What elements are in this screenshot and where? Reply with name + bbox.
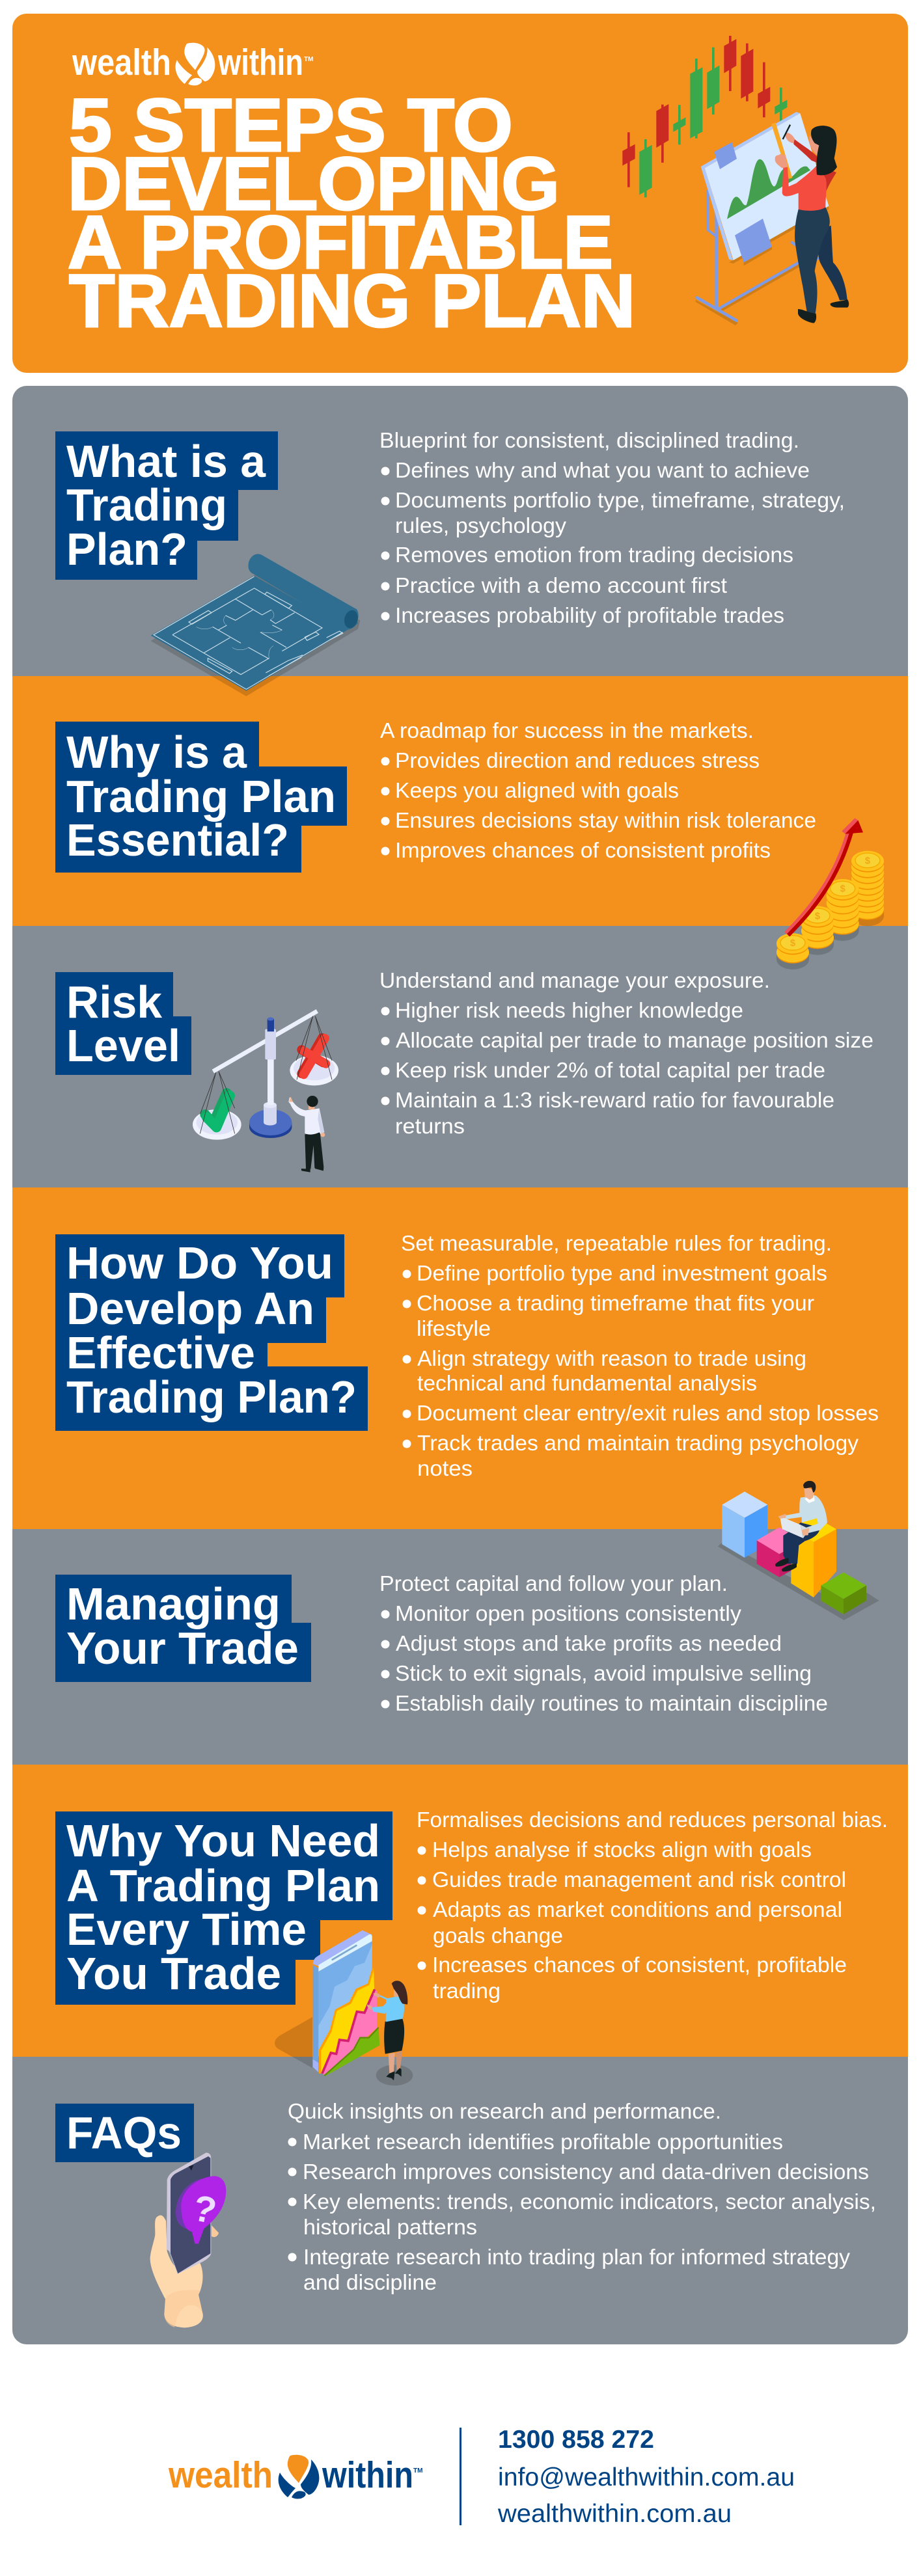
text block: risk level: Higher risk needs higher knowledge	[395, 998, 743, 1022]
title: A PROFITABLE	[68, 201, 613, 284]
heading: managing your trade	[55, 1575, 311, 1682]
text block: what is a trading plan: Defines why and what you want to achieve	[395, 458, 810, 482]
text block: managing your trade: Establish daily routines to maintain discipline	[395, 1691, 828, 1715]
text block: risk level: returns	[395, 1114, 465, 1138]
text block: FAQs: Integrate research into trading plan for informed strategy	[303, 2245, 850, 2269]
stack 2	[801, 906, 834, 949]
text block: what is a trading plan: Blueprint for consistent, disciplined trading.	[379, 428, 799, 452]
text block: why is a trading plan essential: Keeps you aligned with goals	[395, 778, 679, 802]
heading: risk level	[55, 972, 191, 1075]
heading: risk level: Level	[66, 1020, 180, 1071]
heading: what is a trading plan: Plan?	[66, 524, 187, 575]
heading: how do you develop an effective trading plan: Trading Plan?	[66, 1372, 357, 1422]
text block: what is a trading plan: Removes emotion from trading decisions	[395, 543, 793, 567]
text block: why you need a trading plan: Formalises decisions and reduces personal bias.	[417, 1808, 888, 1832]
contact details: 1300 858 272	[498, 2426, 654, 2454]
scale stand	[213, 1011, 317, 1138]
panel: what is a trading plan background	[12, 386, 908, 676]
floor plan lines	[154, 576, 343, 689]
stack 1	[777, 933, 809, 964]
footer logo	[168, 2454, 422, 2499]
text block: what is a trading plan	[379, 428, 845, 627]
footer logo: TM	[413, 2467, 422, 2474]
text block: managing your trade: Adjust stops and take profits as needed	[396, 1631, 782, 1655]
heading: managing your trade: Managing	[66, 1579, 281, 1629]
candlesticks	[622, 36, 787, 197]
text block: risk level	[379, 968, 873, 1138]
header logo: within	[217, 42, 303, 83]
heading: why is a trading plan essential	[55, 722, 347, 873]
text block: why is a trading plan essential	[380, 718, 816, 862]
text block: how do you develop an effective trading plan: lifestyle	[417, 1316, 491, 1340]
easel stand	[697, 191, 818, 321]
heading: why is a trading plan essential: Essential?	[66, 815, 289, 865]
icon: rolled blueprint	[151, 554, 360, 696]
icon: woman drawing candlestick chart on board	[622, 36, 849, 325]
text block: FAQs: Key elements: trends, economic indicators, sector analysis,	[303, 2190, 876, 2214]
hand	[150, 2216, 219, 2327]
text block: managing your trade	[379, 1571, 828, 1715]
text block: managing your trade: Monitor open positions consistently	[395, 1601, 742, 1625]
contact details	[497, 2426, 795, 2528]
text block: how do you develop an effective trading plan: Align strategy with reason to trade using	[417, 1346, 806, 1370]
icon: coin stacks with rising arrow	[777, 818, 884, 969]
icon: logo symbol white	[176, 43, 215, 85]
text block: FAQs: historical patterns	[303, 2215, 477, 2239]
text block: FAQs: Market research identifies profitable opportunities	[303, 2130, 783, 2154]
stack 3: $	[840, 884, 845, 895]
panel: why is a trading plan essential background	[12, 676, 908, 926]
footer logo: wealth	[168, 2454, 273, 2496]
header logo: TM	[304, 56, 313, 63]
icon: hand holding phone with question bubble	[150, 2152, 226, 2327]
contact details: wealthwithin.com.au	[497, 2500, 732, 2528]
arrow	[786, 818, 863, 935]
text block: what is a trading plan: rules, psychology	[395, 513, 567, 537]
left pan with check	[193, 1072, 241, 1140]
title: DEVELOPING	[68, 142, 560, 226]
stack 3	[827, 879, 859, 935]
heading: how do you develop an effective trading plan: Develop An	[66, 1283, 314, 1334]
text block: why you need a trading plan: goals change	[433, 1923, 563, 1947]
text block: how do you develop an effective trading plan: Choose a trading timeframe that fits your	[417, 1291, 814, 1315]
stack 4	[851, 851, 884, 920]
title: TRADING PLAN	[69, 260, 635, 343]
heading: what is a trading plan	[55, 431, 278, 580]
phone	[313, 1931, 372, 2072]
footer logo: within	[322, 2454, 413, 2496]
panel: how do you develop an effective trading plan background	[12, 1187, 908, 1529]
panel: managing your trade background	[12, 1529, 908, 1765]
header logo	[72, 42, 313, 85]
text block: FAQs	[288, 2099, 876, 2294]
text block: risk level: Keep risk under 2% of total capital per trade	[395, 1058, 825, 1082]
title: 5 STEPS TO	[69, 84, 513, 167]
text block: FAQs: Research improves consistency and data-driven decisions	[303, 2160, 869, 2184]
contact details: info@wealthwithin.com.au	[498, 2463, 795, 2491]
text block: how do you develop an effective trading plan: technical and fundamental analysis	[417, 1371, 757, 1395]
text block: how do you develop an effective trading plan: Set measurable, repeatable rules for trading.	[401, 1231, 832, 1255]
panel: risk level background	[12, 926, 908, 1187]
man	[288, 1096, 325, 1173]
question bubble: ?	[189, 2188, 220, 2232]
board	[701, 112, 829, 262]
heading: why is a trading plan essential: Trading Plan	[66, 771, 336, 822]
heading: how do you develop an effective trading plan: Effective	[66, 1327, 255, 1378]
heading: why you need a trading plan every time you trade: Every Time	[66, 1904, 307, 1955]
text block: why you need a trading plan	[417, 1808, 888, 2003]
icon: man with laptop sitting on coloured blocks	[718, 1481, 879, 1620]
heading: managing your trade: Your Trade	[66, 1623, 299, 1674]
rising chart layers	[319, 1968, 379, 2076]
text block: how do you develop an effective trading plan	[401, 1231, 879, 1480]
icon: logo symbol colour	[279, 2455, 319, 2499]
heading: how do you develop an effective trading plan: How Do You	[66, 1238, 333, 1288]
text block: risk level: Allocate capital per trade to manage position size	[396, 1028, 873, 1052]
text block: managing your trade: Protect capital and follow your plan.	[379, 1571, 728, 1595]
text block: how do you develop an effective trading plan: Define portfolio type and investment goals	[417, 1261, 827, 1285]
text block: why you need a trading plan: Helps analyse if stocks align with goals	[432, 1837, 812, 1862]
text block: what is a trading plan: Practice with a demo account first	[395, 573, 727, 597]
stack 4: $	[865, 856, 870, 866]
yellow block	[791, 1516, 836, 1597]
text block: why is a trading plan essential: Improves chances of consistent profits	[395, 838, 771, 862]
text block: how do you develop an effective trading plan: notes	[417, 1456, 473, 1480]
stack 1: $	[790, 938, 795, 949]
icon: woman with giant phone and rising chart	[275, 1931, 413, 2085]
panel: why you need a trading plan background	[12, 1765, 908, 2057]
pink block	[757, 1527, 803, 1577]
text block: how do you develop an effective trading plan: Document clear entry/exit rules and stop losses	[417, 1401, 879, 1425]
question bubble	[176, 2176, 226, 2244]
text block: how do you develop an effective trading plan: Track trades and maintain trading psychology	[417, 1431, 859, 1455]
text block: FAQs: Quick insights on research and performance.	[288, 2099, 721, 2123]
text block: risk level: Understand and manage your exposure.	[379, 968, 770, 992]
text block: why you need a trading plan: trading	[433, 1979, 501, 2003]
text block: why you need a trading plan: Increases chances of consistent, profitable	[432, 1953, 847, 1977]
woman	[771, 122, 849, 323]
text block: why you need a trading plan: Adapts as market conditions and personal	[433, 1897, 842, 1921]
green block	[821, 1573, 866, 1614]
header logo: wealth	[72, 42, 171, 83]
text block: managing your trade: Stick to exit signals, avoid impulsive selling	[395, 1661, 812, 1685]
panel: FAQs background	[12, 2057, 908, 2344]
text block: risk level: Maintain a 1:3 risk-reward ratio for favourable	[395, 1088, 834, 1112]
text block: why is a trading plan essential: A roadmap for success in the markets.	[380, 718, 754, 742]
text block: what is a trading plan: Documents portfolio type, timeframe, strategy,	[395, 488, 845, 512]
stack 2: $	[815, 911, 820, 921]
icon: balance scale with check, cross and man	[193, 1011, 338, 1173]
easel shadows	[696, 206, 829, 325]
phone	[167, 2152, 211, 2274]
text block: why is a trading plan essential: Ensures decisions stay within risk tolerance	[395, 808, 816, 832]
seated man	[775, 1481, 827, 1571]
text block: FAQs: and discipline	[303, 2270, 437, 2294]
panel: header	[12, 14, 908, 373]
heading: how do you develop an effective trading plan	[55, 1234, 368, 1431]
text block: why you need a trading plan: Guides trade management and risk control	[432, 1867, 846, 1891]
text block: what is a trading plan: Increases probability of profitable trades	[395, 603, 784, 627]
right pan with cross	[290, 1016, 338, 1085]
heading: why you need a trading plan every time you trade: You Trade	[66, 1948, 281, 1999]
title	[68, 84, 635, 343]
heading: FAQs: FAQs	[66, 2108, 182, 2158]
heading: what is a trading plan: Trading	[66, 480, 227, 530]
heading: why you need a trading plan every time you trade: A Trading Plan	[66, 1860, 380, 1911]
blue block	[722, 1491, 767, 1558]
heading: why is a trading plan essential: Why is a	[66, 727, 247, 778]
heading: what is a trading plan: What is a	[66, 436, 266, 487]
heading: why you need a trading plan every time you trade: Why You Need	[66, 1815, 380, 1866]
text block: why is a trading plan essential: Provides direction and reduces stress	[395, 748, 760, 772]
heading: risk level: Risk	[66, 977, 162, 1027]
heading: why you need a trading plan every time you trade	[55, 1811, 392, 2005]
woman	[367, 1981, 407, 2080]
